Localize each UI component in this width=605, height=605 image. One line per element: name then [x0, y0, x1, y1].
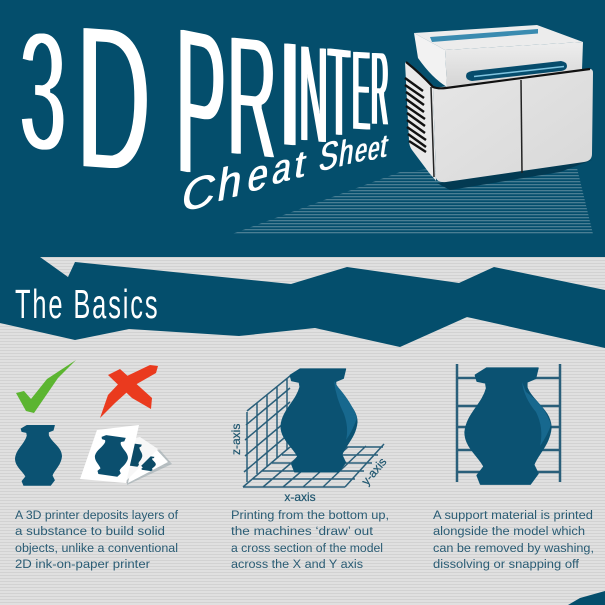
subtitle: Cheat Sheet: [179, 127, 391, 223]
text block: column 2: the machines ‘draw’ out: [231, 524, 374, 538]
subtitle: Cheat Sheet: t: [292, 142, 309, 188]
striped floor under printer: [232, 162, 593, 234]
title: 3D PRINTER: R: [372, 30, 388, 149]
printer top box: [414, 25, 583, 88]
text block: column 3: [433, 508, 594, 571]
icon: paper prints of vase: [80, 425, 172, 485]
text block: column 1: a substance to build solid: [15, 524, 165, 538]
icon: 3D printer: [405, 25, 593, 190]
printer rim: [406, 62, 590, 88]
icon: green check mark: [16, 360, 76, 413]
third sheet: [125, 450, 172, 485]
text block: column 1: objects, unlike a conventional: [15, 541, 178, 555]
icon: vase on axes: [281, 369, 357, 472]
title: 3D PRINTER: T: [328, 19, 350, 165]
chart: 3D axis grid: [243, 376, 384, 487]
heading: The Basics: The Basics: [15, 282, 158, 328]
text block: column 1: [15, 508, 179, 571]
subtitle: Cheat Sheet: h: [337, 130, 356, 175]
subtitle: Cheat Sheet: a: [270, 143, 295, 195]
subtitle: Cheat Sheet: t: [378, 127, 391, 166]
floor grid: [243, 444, 384, 487]
text block: column 2: across the X and Y axis: [231, 557, 363, 571]
subtitle: Cheat Sheet: C: [179, 162, 220, 223]
panel: The Basics striped background: [0, 257, 605, 605]
icon: red cross: [100, 365, 158, 418]
subtitle: Cheat Sheet: e: [244, 146, 272, 203]
subtitle: Cheat Sheet: e: [366, 128, 383, 168]
title: 3D PRINTER: [20, 0, 388, 226]
title: 3D PRINTER: 3: [20, 0, 66, 189]
wall grid: [244, 376, 290, 482]
subtitle: Cheat Sheet: e: [353, 129, 370, 170]
side vents: [405, 78, 426, 152]
front slot: [466, 61, 567, 81]
subtitle: Cheat Sheet: h: [214, 153, 246, 212]
printer lower body: [405, 62, 593, 182]
text block: column 3: alongside the model which: [433, 524, 585, 538]
corner shape: [568, 591, 605, 605]
text block: column 2: a cross section of the model: [231, 541, 383, 555]
title: 3D PRINTER: I: [277, 9, 302, 180]
subtitle: Cheat Sheet: S: [317, 131, 341, 181]
text block: column 3: dissolving or snapping off: [433, 557, 580, 571]
text block: column 1: 2D ink-on-paper printer: [15, 557, 150, 571]
title: 3D PRINTER: N: [300, 14, 328, 174]
printer shadow: [437, 160, 592, 190]
label: y-axis: y-axis: [359, 455, 389, 488]
text block: column 2: Printing from the bottom up,: [231, 508, 389, 522]
second sheet: [122, 437, 158, 482]
text block: column 1: A 3D printer deposits layers of: [15, 508, 179, 522]
text block: column 2: [231, 508, 389, 571]
label: x-axis: x-axis: [284, 490, 316, 504]
section banner: [0, 257, 605, 348]
title: 3D PRINTER: R: [227, 0, 277, 196]
door lines: [431, 80, 522, 177]
top display stripe: [430, 29, 538, 42]
title: 3D PRINTER: E: [352, 25, 370, 156]
icon: solid printed vase: [15, 425, 62, 486]
text block: column 3: A support material is printed: [433, 508, 593, 522]
front sheet: [80, 425, 139, 483]
icon: support scaffold: [457, 364, 560, 482]
label: z-axis: z-axis: [229, 424, 243, 455]
icon: vase with supports: [465, 368, 551, 484]
text block: column 3: can be removed by washing,: [433, 541, 594, 555]
